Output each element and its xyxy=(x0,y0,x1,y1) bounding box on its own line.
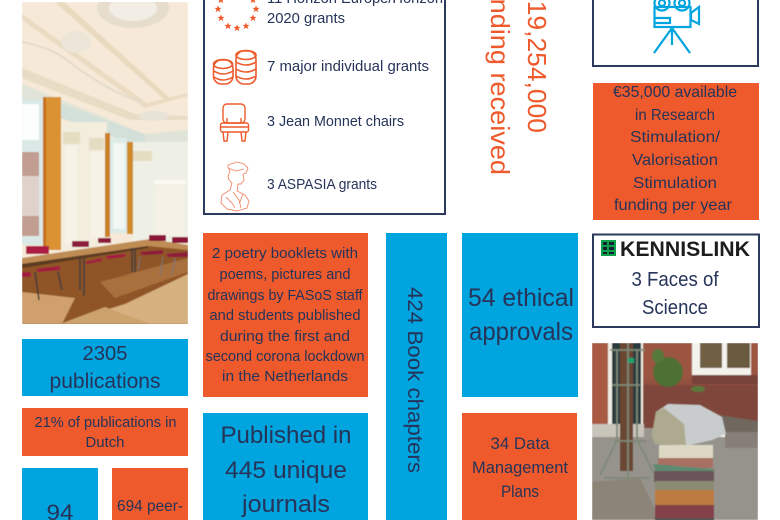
photo: ornate meeting room xyxy=(22,0,188,330)
panel: ethical approvals: approvals xyxy=(469,318,573,346)
panel: poetry booklets: in the Netherlands xyxy=(222,369,348,385)
panel: poetry booklets: drawings by FASoS staff xyxy=(208,288,363,304)
panel: unique journals xyxy=(203,413,368,520)
icon: coins xyxy=(214,50,256,84)
panel: data management plans: 34 Data xyxy=(490,434,550,453)
text: ASPASIA grants: 3 ASPASIA grants xyxy=(267,176,377,193)
panel: data management plans xyxy=(462,413,577,520)
icon: Aspasia bust xyxy=(221,162,249,211)
text: 3 Faces of Science: 3 Faces of xyxy=(632,269,719,291)
panel: research stimulation funding: in Research xyxy=(635,107,715,124)
panel: book chapters xyxy=(386,233,447,520)
panel: research stimulation funding xyxy=(593,83,759,220)
panel: Kennislink xyxy=(593,234,759,327)
photo: book sculpture xyxy=(592,343,758,520)
panel: share of Dutch publications xyxy=(22,408,188,456)
panel: 2305 publications xyxy=(22,339,188,396)
text: major individual grants: 7 major individual grants xyxy=(267,58,429,75)
panel: 694 peer-reviewed: 694 peer- xyxy=(117,498,183,515)
text: Horizon grants xyxy=(267,0,443,27)
panel: unique journals: journals xyxy=(241,491,330,518)
text: Horizon grants: 2020 grants xyxy=(267,10,345,27)
panel: 694 peer-reviewed xyxy=(112,468,188,520)
panel: research stimulation funding: funding per year xyxy=(614,197,733,214)
panel: poetry booklets: and students published xyxy=(210,308,360,324)
panel: video camera xyxy=(593,0,758,66)
text: 3 Faces of Science: Science xyxy=(642,297,708,319)
panel: grants xyxy=(204,0,445,214)
panel: poetry booklets: during the first and xyxy=(220,329,350,345)
text: 3 Faces of Science xyxy=(632,269,719,319)
panel: 94 xyxy=(22,468,98,520)
panel: share of Dutch publications: 21% of publications in xyxy=(34,415,176,431)
panel: poetry booklets xyxy=(203,233,368,397)
panel: poetry booklets: second corona lockdown xyxy=(206,349,364,365)
panel: research stimulation funding: Stimulation xyxy=(633,175,717,192)
panel: 2305 publications: publications xyxy=(50,370,160,393)
panel: share of Dutch publications: Dutch xyxy=(86,435,124,451)
panel: data management plans: Management xyxy=(472,458,568,477)
panel: 2305 publications: 2305 xyxy=(82,343,128,365)
icon: film camera xyxy=(654,0,699,53)
icon: EU stars xyxy=(214,0,260,31)
panel: ethical approvals xyxy=(462,233,578,397)
icon: NEMO logo xyxy=(601,240,616,256)
text: Kennislink logotype: KENNISLINK xyxy=(620,238,750,261)
panel: poetry booklets: poems, pictures and xyxy=(220,267,350,283)
text: Jean Monnet chairs: 3 Jean Monnet chairs xyxy=(267,113,404,130)
panel: research stimulation funding: €35,000 available xyxy=(613,84,737,101)
panel: book chapters: 424 Book chapters xyxy=(403,287,426,473)
panel: unique journals: Published in xyxy=(220,422,352,449)
panel: ethical approvals: 54 ethical xyxy=(468,284,574,312)
panel: research stimulation funding: Valorisation xyxy=(632,152,718,169)
icon: chair xyxy=(220,104,248,141)
panel: research stimulation funding: Stimulation/ xyxy=(630,129,721,146)
panel: poetry booklets: 2 poetry booklets with xyxy=(212,246,358,262)
panel: unique journals: 445 unique xyxy=(225,457,347,484)
panel: data management plans: Plans xyxy=(501,482,539,501)
